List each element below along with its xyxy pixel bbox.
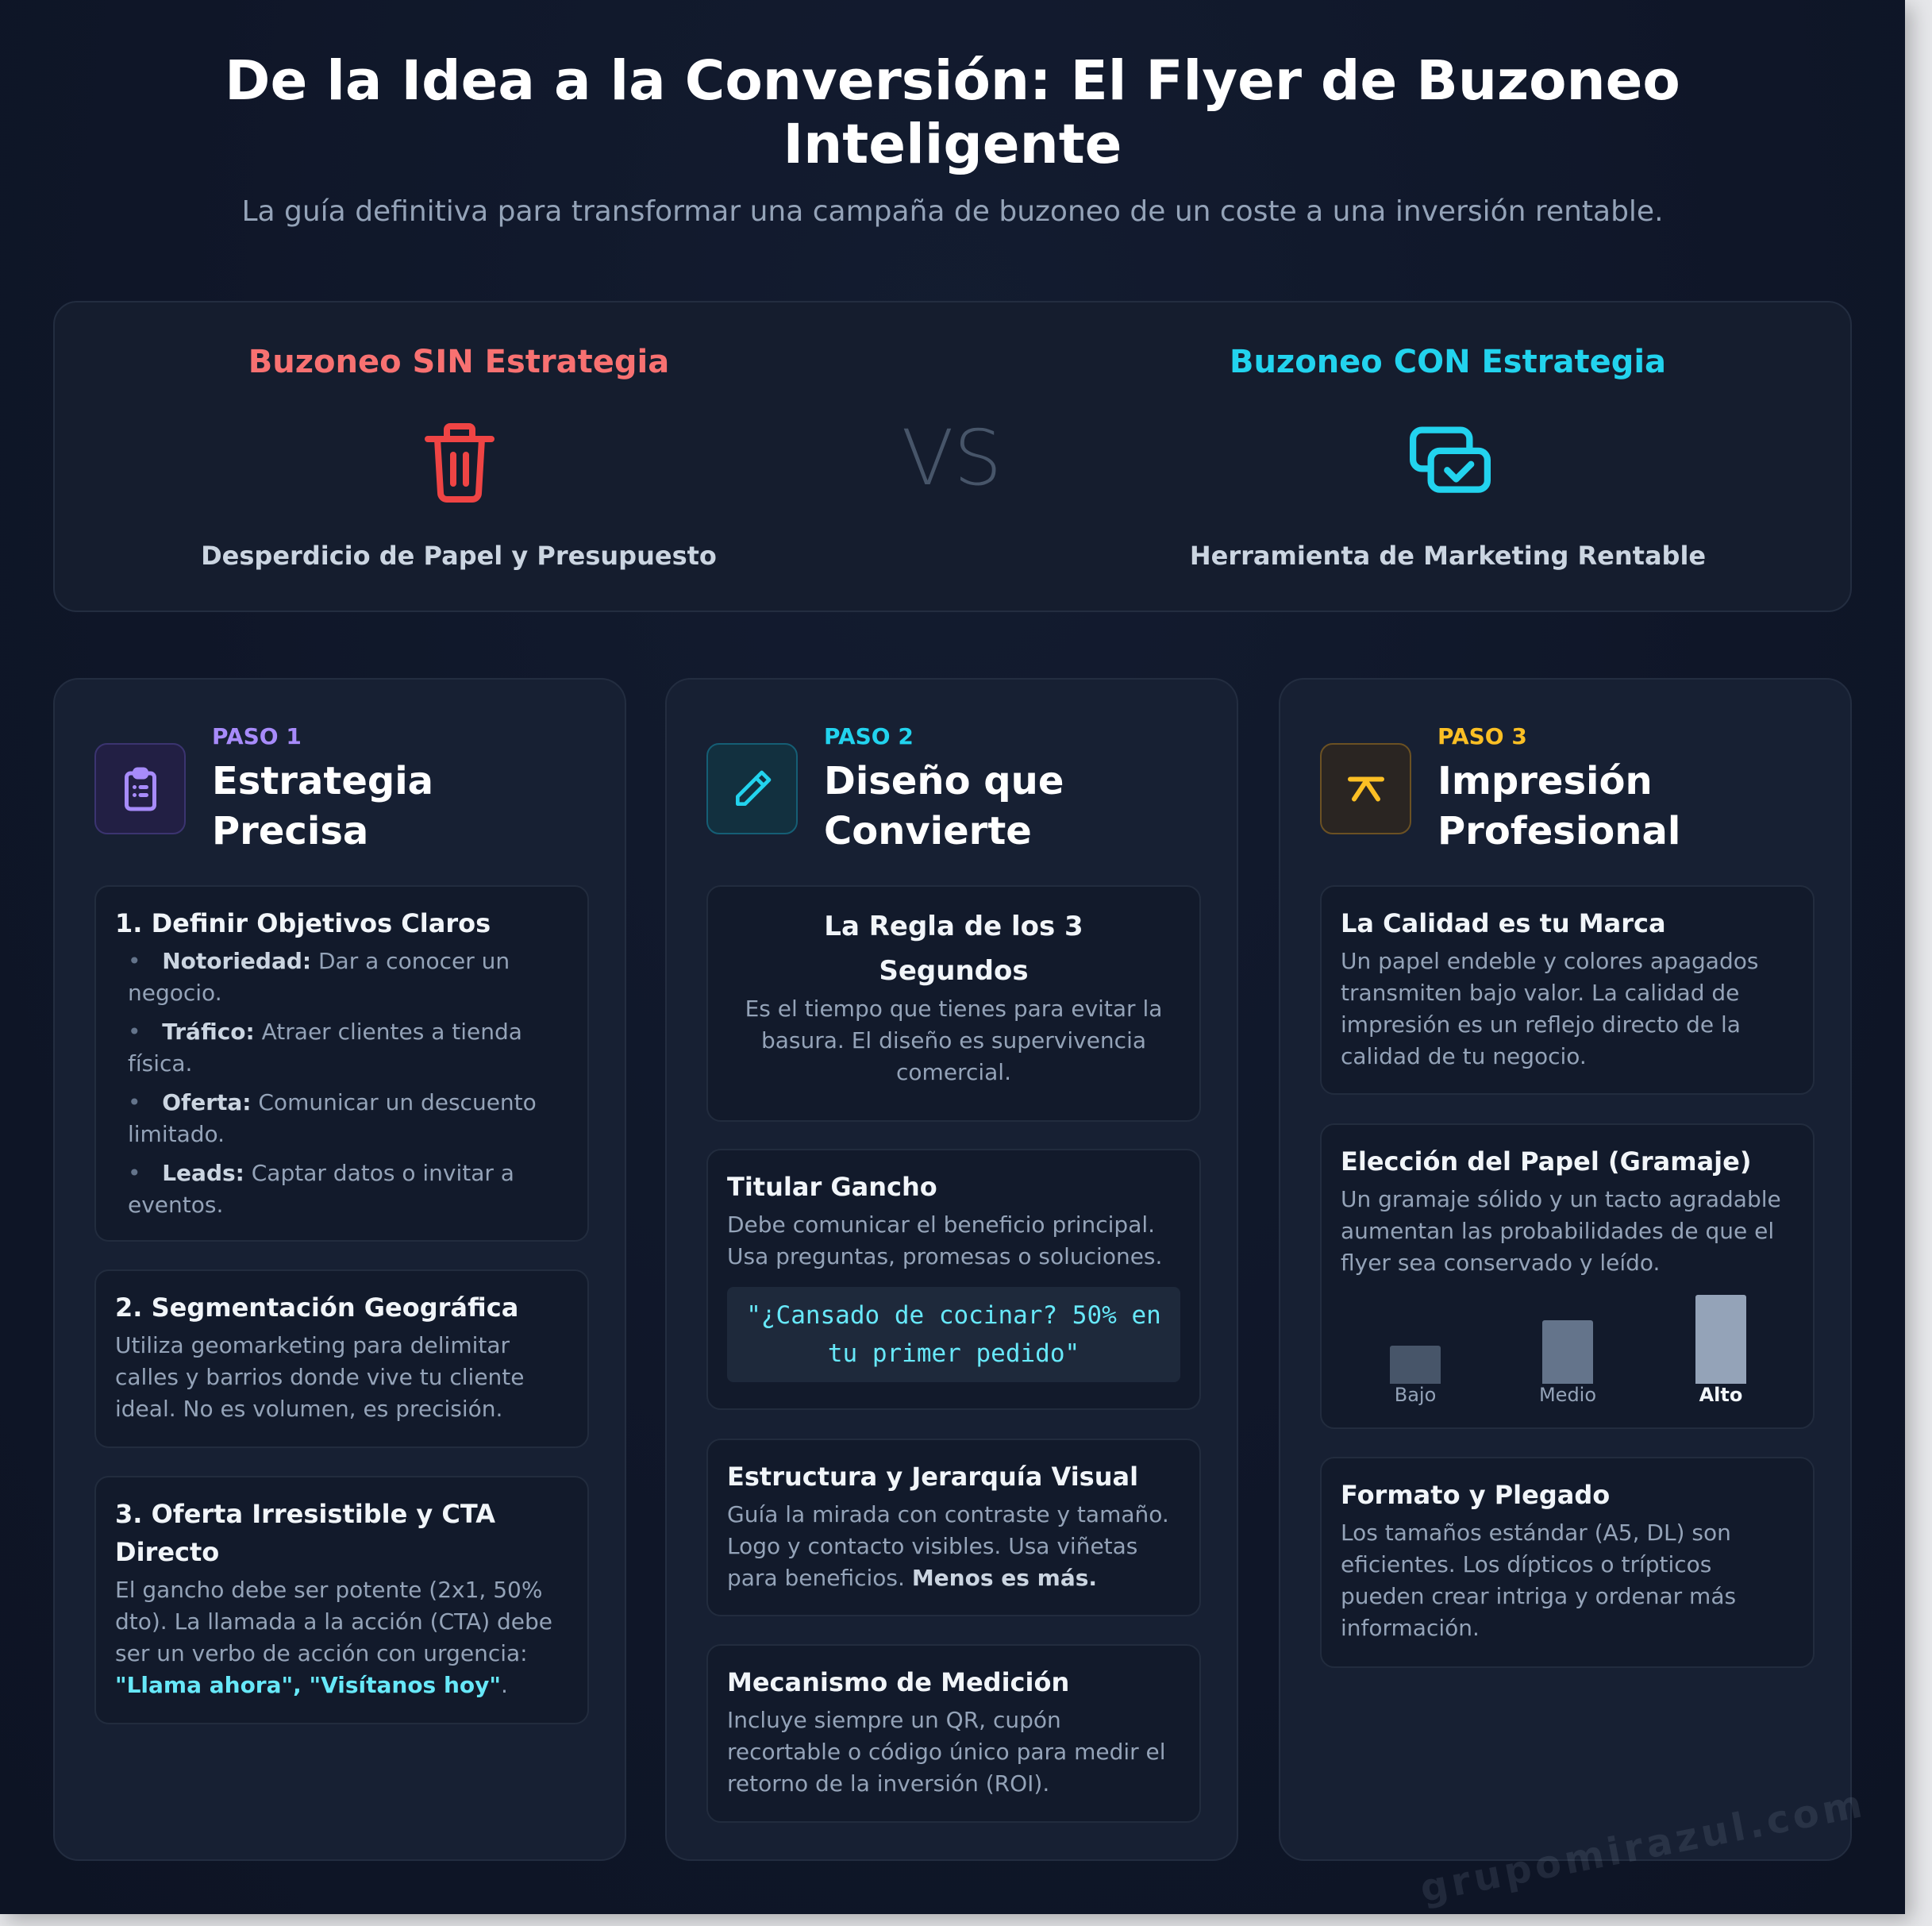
card: regla 3 segundos: Es el tiempo que tienes para evitar la basura. El diseño es supervivencia comercial. <box>745 996 1162 1085</box>
card: objetivos: • Leads: Captar datos o invitar a eventos. <box>128 1160 514 1218</box>
paso label: PASO 2 <box>824 723 914 749</box>
card: formato: Formato y Plegado <box>1341 1480 1610 1510</box>
card: segmentación: 2. Segmentación Geográfica <box>115 1292 518 1323</box>
panel: paso 2 <box>665 678 1238 1861</box>
column title: Impresión <box>1437 759 1653 803</box>
label: desperdicio: Desperdicio de Papel y Presupuesto <box>201 541 717 571</box>
label: herramienta: Herramienta de Marketing Rentable <box>1190 541 1706 571</box>
card: titular gancho: Debe comunicar el beneficio principal. Usa preguntas, promesas o soluciones. <box>727 1211 1162 1269</box>
card: medición <box>706 1644 1201 1823</box>
card: oferta: El gancho debe ser potente (2x1, 50% dto). La llamada a la acción (CTA) debe ser un verbo de acción con urgencia: "Llama ahora", "Visítanos hoy". <box>115 1577 552 1698</box>
card: regla 3 segundos: Segundos <box>879 955 1029 987</box>
card: medición: Mecanismo de Medición <box>727 1667 1069 1697</box>
column title: Precisa <box>212 809 368 853</box>
card: formato <box>1320 1457 1815 1668</box>
card: estructura: Estructura y Jerarquía Visual <box>727 1462 1138 1492</box>
card: gramaje: Elección del Papel (Gramaje) <box>1341 1146 1751 1177</box>
heading: con estrategia: Buzoneo CON Estrategia <box>1230 344 1666 380</box>
icon: print <box>1320 743 1411 834</box>
panel: paso 3 <box>1279 678 1852 1861</box>
card: segmentación: Utiliza geomarketing para delimitar calles y barrios donde vive tu cliente ideal. No es volumen, es precisión. <box>115 1332 525 1422</box>
column title <box>212 759 433 853</box>
bar chart: gramaje: Alto <box>1699 1384 1742 1406</box>
card: objetivos <box>94 885 589 1242</box>
title: Inteligente <box>783 113 1122 176</box>
panel: paso 1 <box>53 678 626 1861</box>
icon: pencil <box>706 743 798 834</box>
card: estructura: Guía la mirada con contraste y tamaño. Logo y contacto visibles. Usa viñetas para beneficios. Menos es más. <box>727 1501 1169 1591</box>
code example <box>727 1287 1180 1382</box>
card: formato: Los tamaños estándar (A5, DL) son eficientes. Los dípticos o trípticos pueden crear intriga y ordenar más información. <box>1341 1520 1736 1641</box>
card: gramaje <box>1320 1123 1815 1429</box>
icon: trash <box>425 423 495 503</box>
card: estructura <box>706 1439 1201 1616</box>
card: calidad: Un papel endeble y colores apagados transmiten bajo valor. La calidad de impresión es un reflejo directo de la calidad de tu negocio. <box>1341 948 1758 1069</box>
card: calidad <box>1320 885 1815 1095</box>
vs: VS <box>902 414 1002 503</box>
icon: check cards <box>1410 427 1491 493</box>
column title: Estrategia <box>212 759 433 803</box>
column title: Diseño que <box>824 759 1064 803</box>
subtitle: La guía definitiva para transformar una campaña de buzoneo de un coste a una inversión rentable. <box>241 195 1664 228</box>
card: regla 3 segundos: La Regla de los 3 <box>824 911 1083 942</box>
bar chart: gramaje: Bajo <box>1395 1384 1436 1406</box>
card: medición: Incluye siempre un QR, cupón recortable o código único para medir el retorno de la inversión (ROI). <box>727 1707 1166 1797</box>
card: objetivos: • Notoriedad: Dar a conocer un negocio. <box>128 948 510 1006</box>
heading: sin estrategia: Buzoneo SIN Estrategia <box>248 344 669 380</box>
title <box>225 49 1680 176</box>
paso label: PASO 3 <box>1437 723 1527 749</box>
panel: comparison <box>53 301 1852 612</box>
column title: Profesional <box>1437 809 1680 853</box>
card: gramaje: Un gramaje sólido y un tacto agradable aumentan las probabilidades de que el flyer sea conservado y leído. <box>1341 1186 1781 1276</box>
watermark: grupomirazul.com <box>1417 1782 1869 1911</box>
column title: Convierte <box>824 809 1032 853</box>
paso label: PASO 1 <box>212 723 302 749</box>
title: De la Idea a la Conversión: El Flyer de Buzoneo <box>225 49 1680 113</box>
bar chart: gramaje <box>1390 1295 1746 1406</box>
code example: "¿Cansado de cocinar? 50% en tu primer pedido" <box>746 1301 1161 1368</box>
card: oferta: 3. Oferta Irresistible y CTA Directo <box>115 1499 495 1567</box>
bar chart: gramaje: Medio <box>1539 1384 1596 1406</box>
card: regla 3 segundos <box>706 885 1201 1122</box>
card: titular gancho: Titular Gancho <box>727 1172 937 1202</box>
card: titular gancho <box>706 1149 1201 1410</box>
icon: clipboard <box>94 743 186 834</box>
card: objetivos: • Tráfico: Atraer clientes a tienda física. <box>128 1019 522 1077</box>
card: calidad: La Calidad es tu Marca <box>1341 908 1666 938</box>
card: objetivos: • Oferta: Comunicar un descuento limitado. <box>128 1089 537 1147</box>
card: objetivos: 1. Definir Objetivos Claros <box>115 908 491 938</box>
card: oferta <box>94 1476 589 1724</box>
card: segmentación <box>94 1269 589 1448</box>
column title <box>824 759 1064 853</box>
column title <box>1437 759 1680 853</box>
